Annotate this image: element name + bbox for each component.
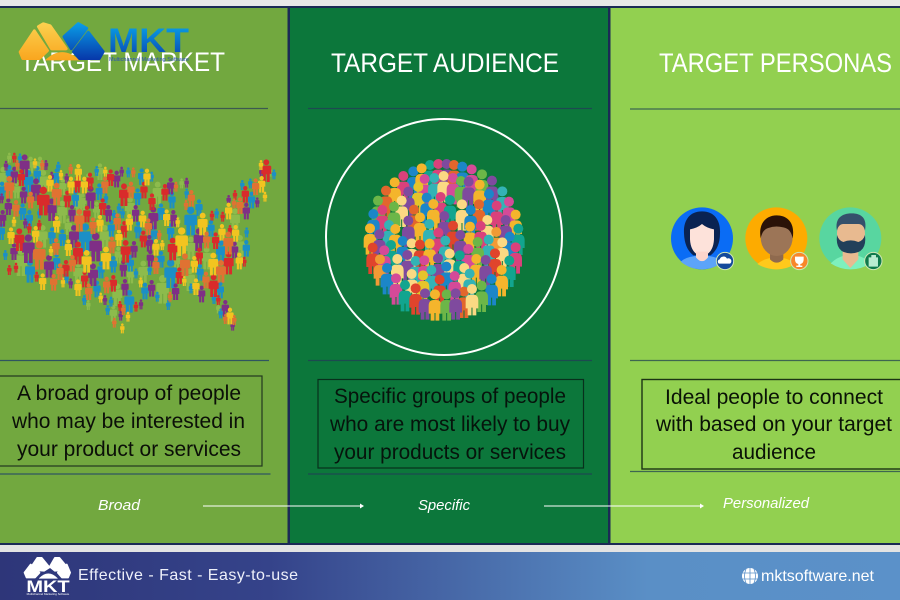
heading: target audience: TARGET AUDIENCE <box>331 48 559 78</box>
heading: target market: TARGET MARKET <box>20 47 225 77</box>
icon: globe <box>742 568 758 584</box>
text box: target market description: your product or services <box>17 438 241 461</box>
people: orange <box>4 160 259 328</box>
icon: man avatar with orange background <box>745 207 807 269</box>
panel: target audience <box>288 6 609 545</box>
text box: target personas description <box>642 380 900 469</box>
people: yellow <box>7 158 267 333</box>
panel: target personas <box>609 6 900 545</box>
footer logo wordmark: MKT <box>26 577 70 596</box>
text box: target market description <box>0 376 262 466</box>
chart: circular crowd of people <box>364 159 525 321</box>
chart: USA map made of people <box>0 153 276 333</box>
page top strip <box>0 0 900 7</box>
text box: target market description: who may be interested in <box>11 410 245 433</box>
text box: target audience description: who are most likely to buy <box>329 413 570 436</box>
panel: target market <box>0 6 288 545</box>
icon: bearded man avatar <box>819 207 881 269</box>
footer logo <box>25 558 70 596</box>
text box: target personas description: with based on your target <box>655 413 892 436</box>
text box: target audience description: Specific groups of people <box>334 385 566 408</box>
text box: target market description: A broad group of people <box>17 382 241 405</box>
logo: MKT top left <box>20 22 189 63</box>
label: specific: Specific <box>418 497 470 514</box>
label: personalized: Personalized <box>723 495 810 512</box>
arrow: broad to specific <box>203 504 364 508</box>
icon: trophy badge <box>791 252 808 270</box>
text box: target audience description <box>318 380 584 468</box>
text box: target personas description: Ideal people to connect <box>665 386 883 409</box>
logo tagline: Multichannel Marketing Software <box>109 57 189 63</box>
arrow: specific to personalized <box>544 504 704 508</box>
footer tagline: Effective - Fast - Easy-to-use <box>78 567 298 584</box>
footer website: mktsoftware.net <box>761 568 875 585</box>
logo wordmark: MKT <box>108 22 189 60</box>
icon: building badge <box>865 252 882 270</box>
grey separator <box>0 545 900 552</box>
text box: target personas description: audience <box>732 441 816 464</box>
ring around crowd <box>326 119 562 355</box>
people: blue <box>0 153 276 318</box>
text box: target audience description: your products or services <box>334 441 566 464</box>
people: purple <box>0 154 264 331</box>
icon: cloud badge <box>716 252 734 270</box>
logo mark <box>20 24 103 60</box>
footer logo small tagline: Multichannel Marketing Software <box>27 592 70 596</box>
footer bar <box>0 552 900 600</box>
people: red <box>7 153 271 312</box>
icon: woman avatar <box>671 207 733 269</box>
label: broad: Broad <box>98 497 141 514</box>
avatars group <box>671 207 882 270</box>
people: light green <box>0 153 272 322</box>
